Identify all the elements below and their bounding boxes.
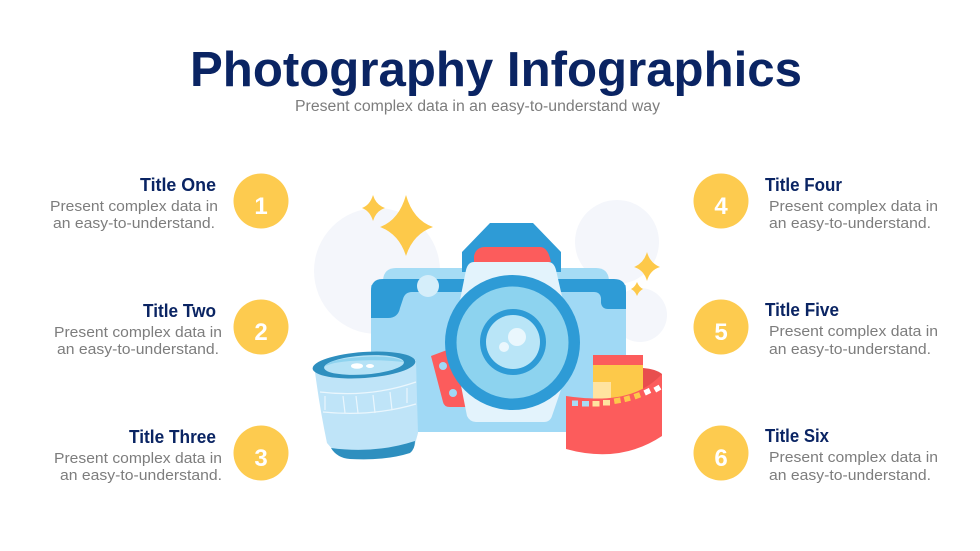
icon: lens barrel [312, 348, 418, 459]
item: Title One [50, 174, 288, 232]
prism red band [474, 247, 551, 262]
item: Title Five: Title Five [765, 300, 839, 320]
item: Title Three: Present complex data in [54, 450, 222, 467]
shutter button [417, 275, 439, 297]
barrel body [315, 360, 418, 452]
lens rim [312, 348, 416, 382]
icon: sparkles [362, 195, 660, 296]
glass shade [325, 357, 404, 366]
item: Title Two: 2 [254, 319, 268, 346]
item: Title Six: an easy-to-understand. [769, 467, 931, 484]
barrel base [331, 441, 415, 459]
film strip [566, 374, 662, 454]
item: Title Two: Present complex data in [54, 324, 222, 341]
item: Title One: an easy-to-understand. [53, 215, 215, 232]
lens glass [323, 353, 405, 377]
item: Title Three [54, 426, 288, 484]
item: Title One: 1 [254, 193, 268, 220]
film perforations [572, 385, 661, 406]
item: Title Four: an easy-to-understand. [769, 215, 931, 232]
camera grip bands [371, 279, 626, 318]
item: Title Two: an easy-to-understand. [57, 341, 219, 358]
item: Title Six: Title Six [765, 426, 829, 446]
camera top plate [383, 268, 609, 285]
item: Title Five: 5 [714, 319, 728, 346]
item: Title Two: Title Two [143, 301, 216, 321]
viewfinder prism [462, 223, 561, 272]
background blobs [314, 200, 667, 342]
item: Title Six: 6 [714, 445, 728, 472]
subtitle: Present complex data in an easy-to-understand way [295, 98, 660, 115]
focus ring markings [320, 382, 416, 413]
item: Title Four: 4 [714, 193, 728, 220]
item: Title Five: Present complex data in [769, 323, 938, 340]
icon: camera [371, 223, 626, 432]
glass highlights [351, 363, 374, 369]
film back [643, 368, 662, 400]
item: Title Six [694, 426, 938, 484]
icon: film roll [566, 355, 662, 454]
item: Title Five: an easy-to-understand. [769, 341, 931, 358]
front panel [452, 262, 572, 422]
item: Title Three: Title Three [129, 427, 216, 447]
item: Title Three: 3 [254, 445, 268, 472]
item: Title Five [694, 300, 938, 358]
title: Photography Infographics [190, 43, 802, 97]
item: Title Four [694, 174, 938, 232]
camera body [371, 285, 626, 432]
item: Title One: Title One [140, 175, 216, 195]
photo print [593, 355, 643, 399]
item: Title One: Present complex data in [50, 198, 218, 215]
item: Title Six: Present complex data in [769, 449, 938, 466]
item: Title Four: Title Four [765, 175, 842, 195]
red strap [431, 350, 470, 407]
item: Title Three: an easy-to-understand. [60, 467, 222, 484]
item: Title Four: Present complex data in [769, 198, 938, 215]
item: Title Two [54, 300, 288, 358]
lens [445, 275, 580, 410]
